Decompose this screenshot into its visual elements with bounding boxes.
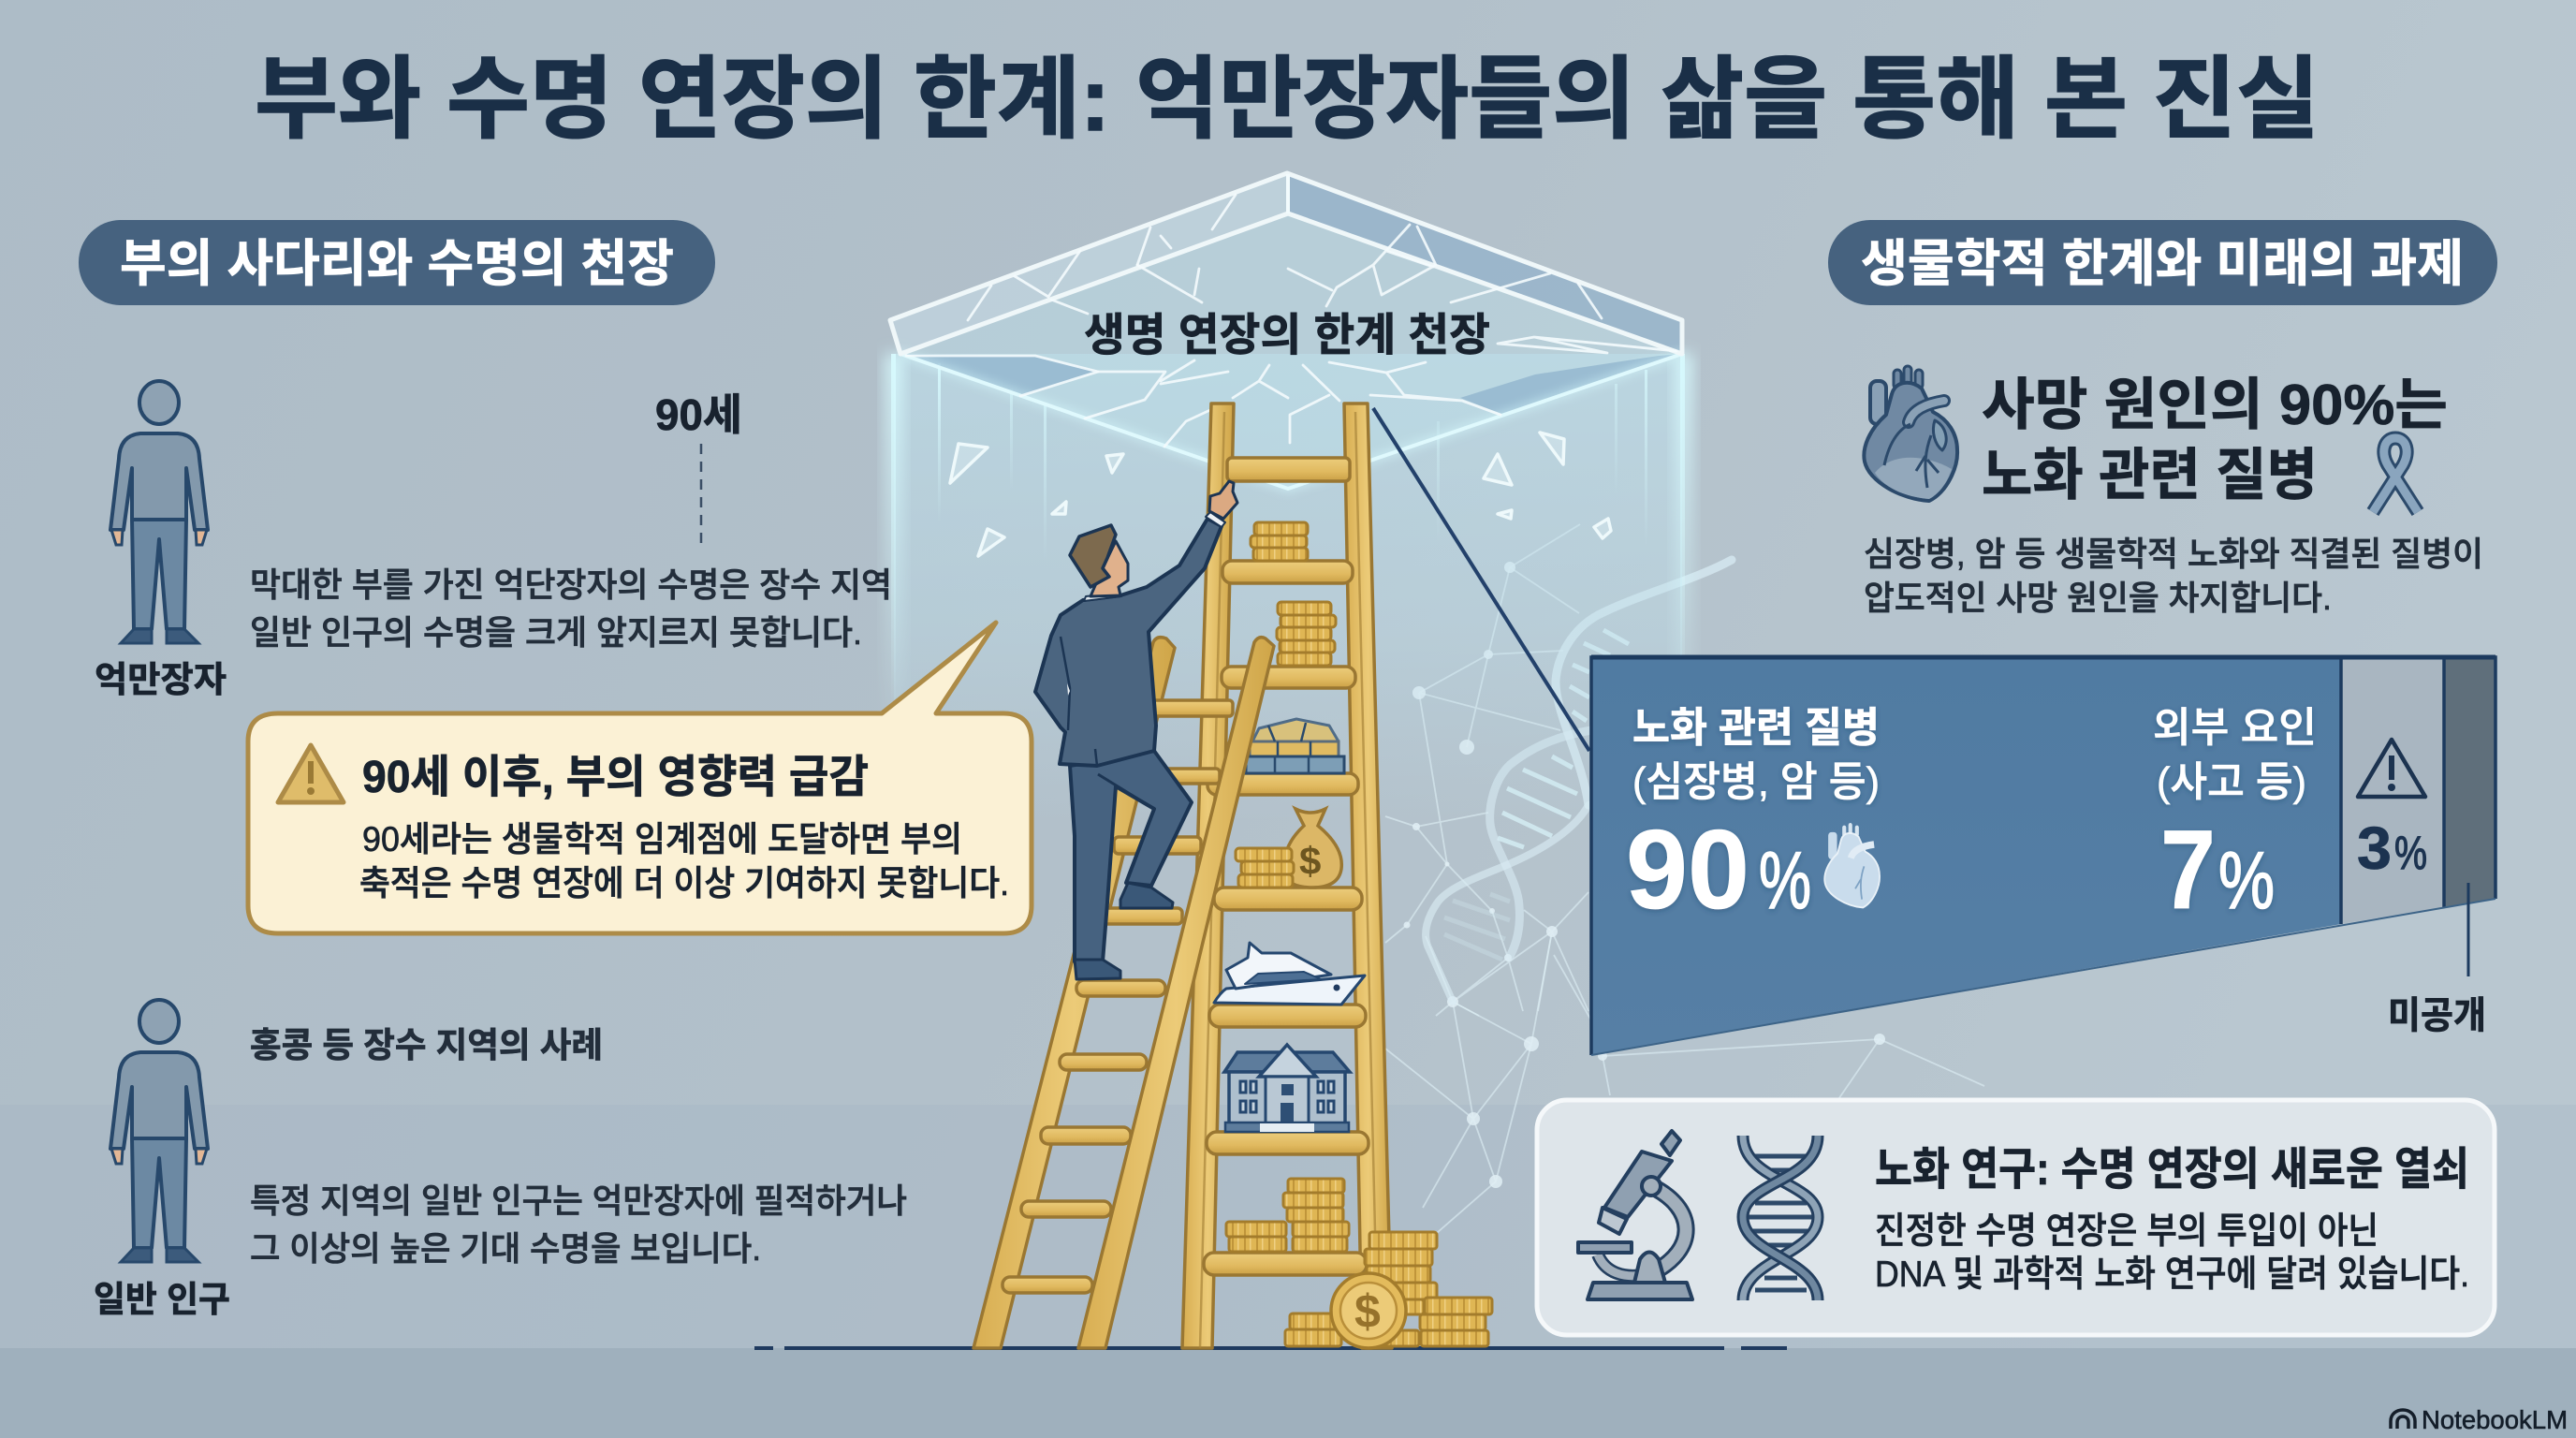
text: long-lived regions	[250, 1181, 907, 1268]
text: aging disease description	[1864, 535, 2483, 617]
segment: 3 percent	[2341, 657, 2444, 924]
callout: wealth influence after 90: 축적은 수명 연장에 더 이상 기여하지 못합니다.	[359, 864, 1009, 902]
upright ladder with wealth shelves	[1182, 404, 1392, 1348]
segment: aging diseases 90 percent	[1591, 657, 2341, 1055]
title: 부와 수명 연장의 한계: 억만장자들의 삶을 통해 본 진실	[255, 50, 2320, 150]
coin pile with dollar coin: $	[1354, 1285, 1381, 1338]
money bag and coins	[1236, 809, 1341, 888]
segment: aging diseases 90 percent: 90	[1626, 807, 1749, 932]
segment: aging diseases 90 percent: 노화 관련 질병	[1632, 705, 1880, 751]
right section pill	[1828, 220, 2497, 305]
segment: external factors 7 percent: %	[2218, 836, 2275, 926]
heading: 90 percent of deaths	[1982, 374, 2448, 506]
coin pile with dollar coin	[1285, 1232, 1492, 1348]
mansion	[1224, 1045, 1350, 1132]
icon: general population figure	[110, 1000, 208, 1262]
glass ceiling	[886, 173, 1692, 822]
text: billionaire lifespan: 일반 인구의 수명을 크게 앞지르지 못합니다.	[250, 613, 862, 652]
businessman climbing	[1035, 481, 1237, 979]
text: billionaire lifespan	[250, 565, 892, 652]
money bag and coins: $	[1299, 839, 1321, 883]
coin stack top	[1251, 522, 1308, 561]
segment: external factors 7 percent: 외부 요인	[2153, 705, 2317, 751]
panel: aging research	[1537, 1100, 2495, 1335]
NotebookLM watermark: NotebookLM	[2422, 1405, 2568, 1434]
icon: DNA	[1743, 1136, 1818, 1300]
90 age marker: 90세	[655, 390, 742, 439]
segment: 3 percent: %	[2394, 827, 2427, 879]
chart: causes of death wedge: 미공개	[2388, 995, 2486, 1036]
shelf rungs	[1204, 458, 1368, 1275]
callout: wealth influence after 90: 90세 이후, 부의 영향력 급감	[362, 753, 869, 802]
heading: Hong Kong case: 홍콩 등 장수 지역의 사례	[250, 1026, 603, 1064]
segment: external factors 7 percent	[2153, 705, 2317, 932]
text: aging disease description: 심장병, 암 등 생물학적 노화와 직결된 질병이	[1864, 535, 2483, 573]
text: long-lived regions: 그 이상의 높은 기대 수명을 보입니다.	[250, 1229, 761, 1268]
coin stack second	[1277, 602, 1336, 666]
background network and DNA helix	[1385, 524, 1984, 1245]
yacht	[1214, 943, 1365, 1005]
label: general population: 일반 인구	[94, 1281, 230, 1320]
chart: causes of death wedge	[1591, 657, 2496, 1055]
callout: wealth influence after 90	[248, 623, 1032, 933]
segment: aging diseases 90 percent: (심장병, 암 등)	[1632, 759, 1880, 805]
leaning ladder front rail	[1078, 638, 1274, 1348]
segment: aging diseases 90 percent: %	[1759, 836, 1811, 926]
heading: 90 percent of deaths: 노화 관련 질병	[1982, 444, 2318, 506]
icon: anatomical heart	[1864, 370, 1957, 501]
ground strip	[0, 1346, 2576, 1438]
label: billionaire: 억만장자	[95, 661, 227, 700]
heading: 90 percent of deaths: 사망 원인의 90%는	[1982, 374, 2448, 436]
right section pill: 생물학적 한계와 미래의 과제	[1861, 236, 2464, 292]
segment: undisclosed	[2444, 657, 2496, 907]
gold bars	[1246, 719, 1344, 773]
coin stacks on bottom shelf	[1226, 1179, 1349, 1252]
panel: aging research: 진정한 수명 연장은 부의 투입이 아닌	[1875, 1211, 2378, 1252]
text: long-lived regions: 특정 지역의 일반 인구는 억만장자에 필적하거나	[250, 1181, 907, 1220]
callout: wealth influence after 90: 90세라는 생물학적 임계점에 도달하면 부의	[362, 820, 962, 858]
panel: aging research: DNA 및 과학적 노화 연구에 달려 있습니다.	[1875, 1255, 2469, 1295]
leaning ladder rear part	[973, 638, 1233, 1348]
icon: warning triangle	[278, 745, 344, 802]
connector line from ceiling to chart	[1373, 408, 1589, 751]
panel: aging research: 노화 연구: 수명 연장의 새로운 열쇠	[1875, 1145, 2469, 1195]
segment: 3 percent: 3	[2357, 814, 2392, 882]
icon: awareness ribbon	[2373, 438, 2418, 512]
text: billionaire lifespan: 막대한 부를 가진 억단장자의 수명은 장수 지역	[250, 565, 892, 604]
left section pill: 부의 사다리와 수명의 천장	[120, 236, 674, 292]
segment: external factors 7 percent: (사고 등)	[2157, 759, 2306, 805]
icon: billionaire figure	[110, 381, 208, 643]
icon: outline warning triangle	[2358, 740, 2425, 797]
icon: small heart	[1824, 825, 1880, 907]
text: aging disease description: 압도적인 사망 원인을 차지합니다.	[1864, 579, 2332, 617]
icon: microscope	[1578, 1131, 1692, 1299]
ceiling label: 생명 연장의 한계 천장	[1084, 311, 1490, 360]
segment: external factors 7 percent: 7	[2160, 807, 2216, 932]
left section pill	[79, 220, 715, 305]
